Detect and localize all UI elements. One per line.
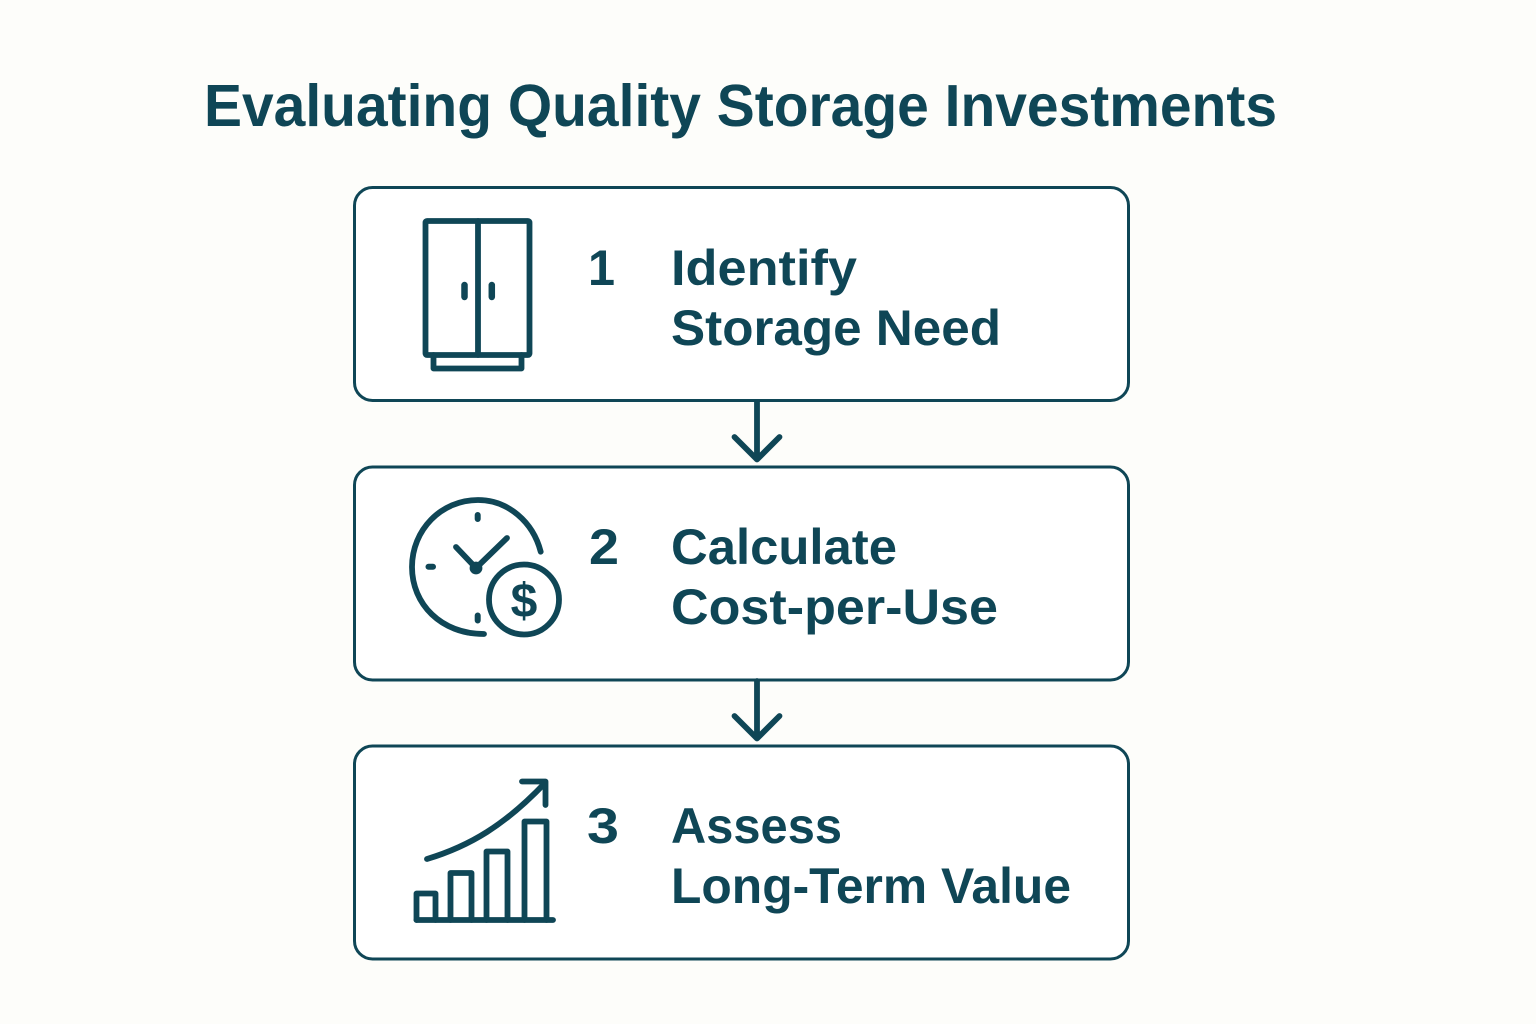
step 1 label: Storage Need (671, 300, 1001, 356)
step 1 label: Identify (671, 240, 857, 296)
step number 2: 2 (589, 519, 619, 575)
step number 1: 1 (588, 240, 615, 296)
step number 3: 3 (587, 798, 619, 854)
icon: wardrobe (426, 221, 530, 368)
icon: clock with dollar coin: $ (511, 575, 538, 628)
step 3 label: Assess (671, 798, 842, 854)
panel: step 1 identify storage need (354, 188, 1128, 400)
step 2 label (671, 519, 998, 635)
arrow: step 2 to step 3 (734, 681, 780, 738)
icon: rising bar chart with arrow (416, 782, 553, 920)
step 1 label (671, 240, 1001, 356)
panel: step 3 assess long-term value (354, 746, 1128, 959)
step 3 label (671, 798, 1071, 914)
step 2 label: Calculate (671, 519, 897, 575)
arrow: step 1 to step 2 (734, 402, 780, 460)
step 3 label: Long-Term Value (671, 858, 1071, 914)
title: Evaluating Quality Storage Investments (204, 73, 1277, 139)
panel: step 2 calculate cost-per-use (354, 467, 1128, 680)
step 2 label: Cost-per-Use (671, 579, 998, 635)
icon: clock with dollar coin (412, 500, 559, 634)
